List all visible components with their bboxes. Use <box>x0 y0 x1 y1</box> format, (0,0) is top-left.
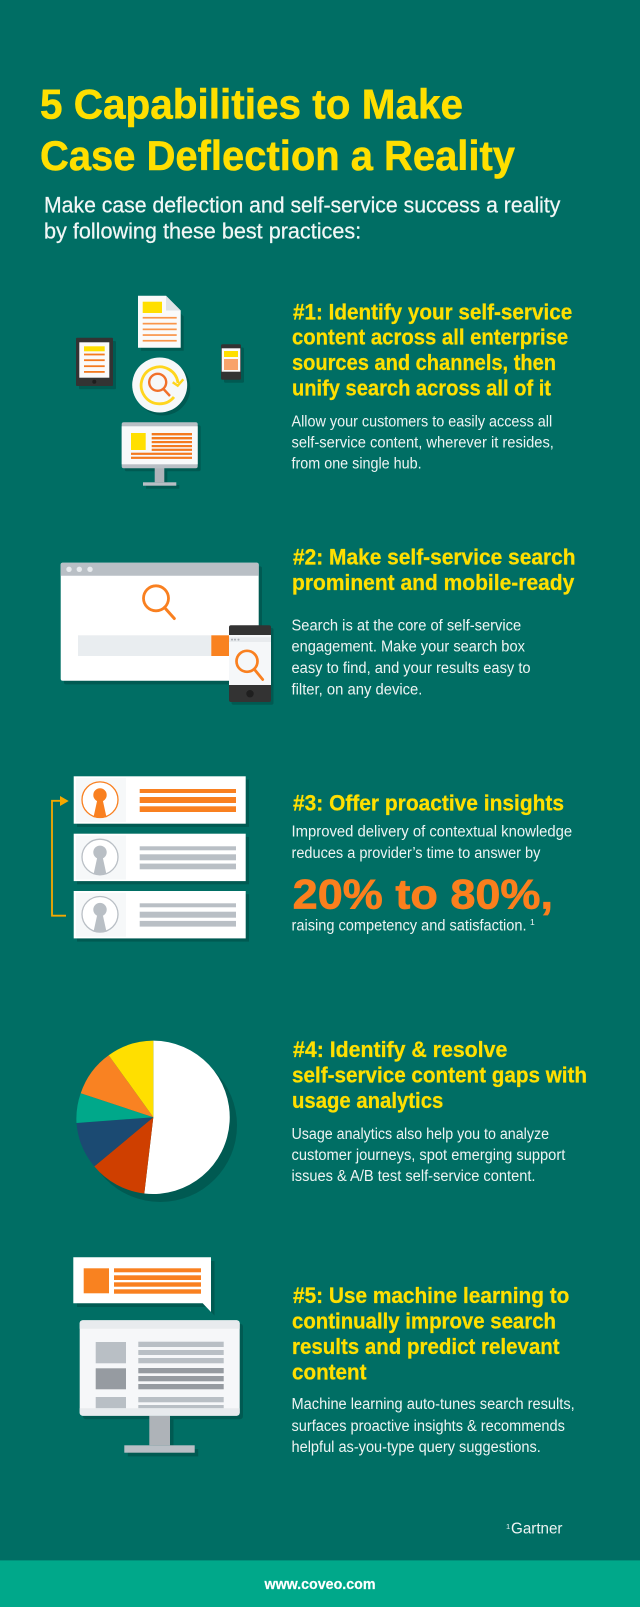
body: capability 3 closing: raising competency and satisfaction. <box>292 917 526 934</box>
icon: smartphone <box>221 344 244 383</box>
heading: capability 4: self-service content gaps with <box>292 1062 587 1087</box>
icon: mobile phone with search <box>229 625 274 705</box>
heading: capability 4: #4: Identify & resolve <box>293 1037 507 1062</box>
illustration: proactive insights ranked cards <box>52 776 249 942</box>
heading: capability 4: usage analytics <box>292 1088 443 1113</box>
section 4 text <box>292 1037 587 1185</box>
heading: capability 5: content <box>292 1360 367 1385</box>
heading: capability 2: #2: Make self-service search <box>293 545 576 570</box>
body: capability 5: Machine learning auto-tunes search results, <box>292 1396 575 1413</box>
source footnote: Gartner <box>511 1521 562 1538</box>
body: capability 1: Allow your customers to easily access all <box>292 413 552 430</box>
body: capability 1: from one single hub. <box>292 455 422 472</box>
pie chart: usage analytics <box>76 1041 237 1202</box>
body: capability 2: filter, on any device. <box>292 681 422 698</box>
card: second result <box>74 834 249 884</box>
heading: capability 3: #3: Offer proactive insights <box>293 791 564 816</box>
body: capability 1: self-service content, wherever it resides, <box>292 434 554 451</box>
body: capability 2: engagement. Make your search box <box>292 639 525 656</box>
section 3 text <box>292 791 572 934</box>
title: 5 Capabilities to Make <box>40 80 463 127</box>
arrow: bottom card promoted to top <box>52 796 69 916</box>
body: capability 5 <box>292 1396 575 1456</box>
subtitle: by following these best practices: <box>44 218 361 243</box>
subtitle <box>44 193 560 243</box>
heading: capability 5: results and predict relevant <box>292 1334 560 1359</box>
heading: capability 4 <box>292 1037 587 1113</box>
key statistic: 20% to 80%: 20% to 80%, <box>293 870 553 917</box>
icon: monitor with search results <box>80 1320 243 1456</box>
source footnote: 1 <box>506 1522 510 1531</box>
heading: capability 1 <box>292 299 572 401</box>
subtitle: Make case deflection and self-service success a reality <box>44 193 560 218</box>
icon: browser window <box>61 563 262 684</box>
body: capability 1 <box>292 413 554 472</box>
footer bar: www.coveo.com <box>264 1576 376 1593</box>
title: Case Deflection a Reality <box>40 132 516 179</box>
title <box>40 80 516 179</box>
icon: desktop monitor <box>122 422 201 489</box>
body: capability 4: Usage analytics also help you to analyze <box>292 1126 549 1143</box>
section 2 text <box>292 545 576 698</box>
body: capability 2 <box>292 617 531 698</box>
illustration: browser search and mobile <box>61 563 274 705</box>
body: capability 4: issues & A/B test self-service content. <box>292 1168 536 1185</box>
heading: capability 2 <box>292 545 576 595</box>
card: top highlighted result <box>74 776 249 827</box>
body: capability 3 closing: 1 <box>530 917 535 927</box>
heading: capability 5: continually improve search <box>292 1308 556 1333</box>
heading: capability 2: prominent and mobile-ready <box>292 570 575 595</box>
icon: search hub circle <box>132 358 190 416</box>
illustration: unified search across devices <box>76 296 244 489</box>
body: capability 4 <box>292 1126 566 1185</box>
heading: capability 5 <box>292 1283 569 1385</box>
illustration: machine learning recommendation <box>73 1257 243 1456</box>
body: capability 5: surfaces proactive insights & recommends <box>292 1418 565 1435</box>
body: capability 5: helpful as-you-type query suggestions. <box>292 1439 541 1456</box>
heading: capability 1: sources and channels, then <box>292 350 556 375</box>
section 1 text <box>292 299 572 472</box>
body: capability 4: customer journeys, spot emerging support <box>292 1147 566 1164</box>
icon: tablet <box>76 338 116 389</box>
icon: speech bubble suggestion <box>73 1257 214 1316</box>
body: capability 3 intro <box>292 824 572 862</box>
body: capability 3 intro: Improved delivery of contextual knowledge <box>292 824 572 841</box>
heading: capability 1: unify search across all of it <box>292 376 552 401</box>
card: third result <box>74 891 249 942</box>
body: capability 3 intro: reduces a provider’s time to answer by <box>292 845 541 862</box>
body: capability 2: Search is at the core of self-service <box>292 617 521 634</box>
footer bar <box>0 1560 640 1607</box>
body: capability 2: easy to find, and your results easy to <box>292 660 531 677</box>
heading: capability 1: #1: Identify your self-service <box>293 299 572 324</box>
heading: capability 5: #5: Use machine learning to <box>293 1283 569 1308</box>
section 5 text <box>292 1283 575 1456</box>
heading: capability 1: content across all enterprise <box>292 324 568 349</box>
icon: document <box>138 296 184 351</box>
